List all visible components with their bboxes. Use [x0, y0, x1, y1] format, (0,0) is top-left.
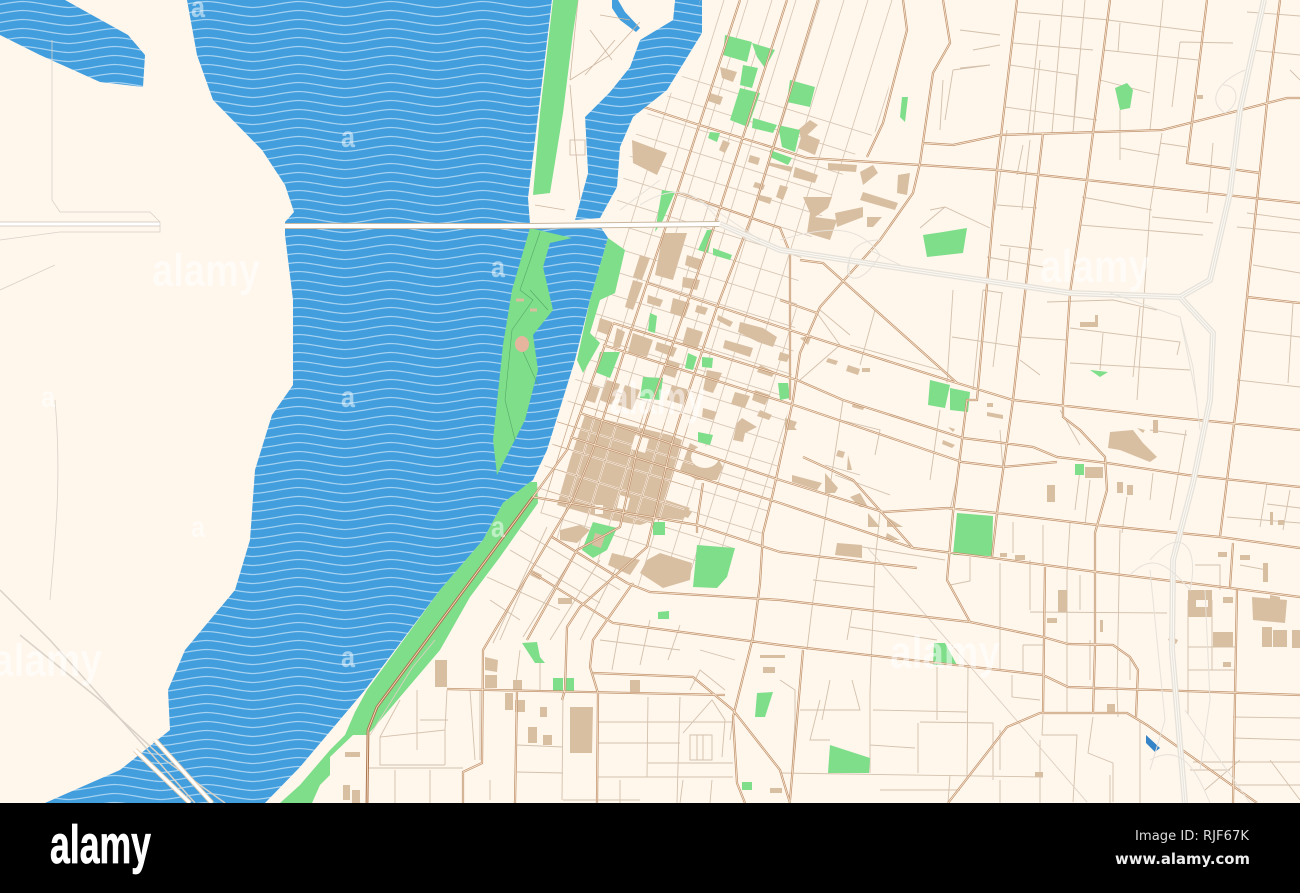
riverside rail corridor [367, 497, 533, 803]
city blocks: street gaps in the core [548, 402, 698, 530]
oval park [1115, 83, 1133, 110]
watermark: alamy [152, 244, 260, 296]
green riverbank strip [280, 482, 538, 803]
watermark: a [41, 381, 55, 414]
stadium hole and plazas [595, 435, 1208, 607]
river: main channel [45, 0, 608, 803]
watermark: a [341, 641, 355, 674]
watermark: a [341, 121, 355, 154]
green parks [522, 35, 1133, 790]
small pond [1146, 735, 1160, 752]
green park on southern island [493, 228, 572, 475]
watermark: a [191, 511, 205, 544]
logo: alamy: alamy [50, 815, 151, 875]
river: upper left lobe [0, 0, 145, 87]
inlet on island [612, 0, 640, 32]
buildings [343, 67, 1300, 803]
major roads [447, 0, 1300, 803]
image id: Image ID: RJF67K [1135, 829, 1249, 844]
watermark: alamy [1040, 240, 1150, 292]
island streets [535, 0, 640, 210]
watermark: a [491, 251, 505, 284]
plaza in south park [592, 533, 605, 548]
minor streets: east side [780, 0, 1300, 803]
watermark: a [491, 511, 505, 544]
land road west side [0, 40, 160, 600]
watermark [0, 0, 1150, 686]
southwest bridge [0, 590, 225, 803]
island land strip [549, 0, 675, 220]
river: upper side channel [575, 0, 702, 220]
watermark: alamy [610, 372, 705, 424]
expressway network [620, 0, 1264, 803]
minor streets: southwest side [367, 527, 735, 803]
main bridge [0, 224, 720, 226]
black footer bar [0, 803, 1300, 893]
watermark: a [341, 381, 355, 414]
green strip on island [533, 0, 578, 195]
thin grid: downtown [536, 0, 892, 586]
watermark: alamy [890, 626, 1000, 678]
site url: www.alamy.com [1115, 850, 1250, 868]
